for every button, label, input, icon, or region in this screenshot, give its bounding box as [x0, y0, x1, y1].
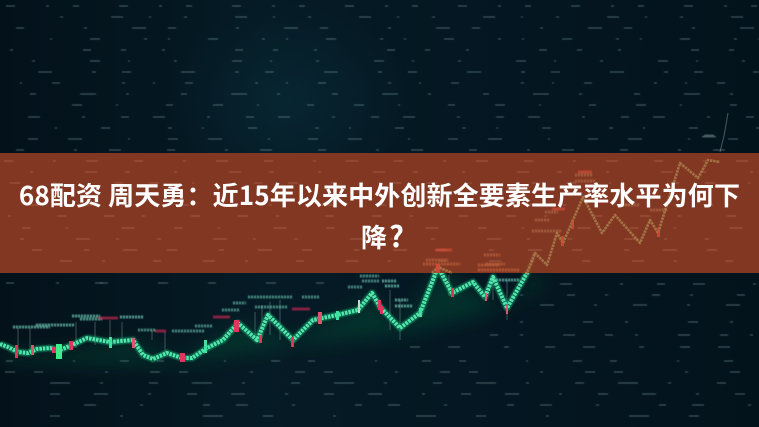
line: green glow [0, 253, 535, 359]
chart glow [0, 268, 540, 364]
line: price line through banner [432, 160, 720, 273]
title: 降? [361, 214, 404, 256]
vertical wicks [18, 275, 507, 356]
title banner [0, 153, 759, 273]
price line [0, 253, 535, 359]
candles in banner [436, 220, 660, 273]
candlesticks [15, 288, 508, 362]
small number clusters above the chart [13, 276, 520, 331]
upper right spark [702, 113, 728, 152]
title [19, 176, 740, 256]
title: 68配资 周天勇：近15年以来中外创新全要素生产率水平为何下 [19, 176, 740, 213]
line: main [0, 253, 535, 359]
